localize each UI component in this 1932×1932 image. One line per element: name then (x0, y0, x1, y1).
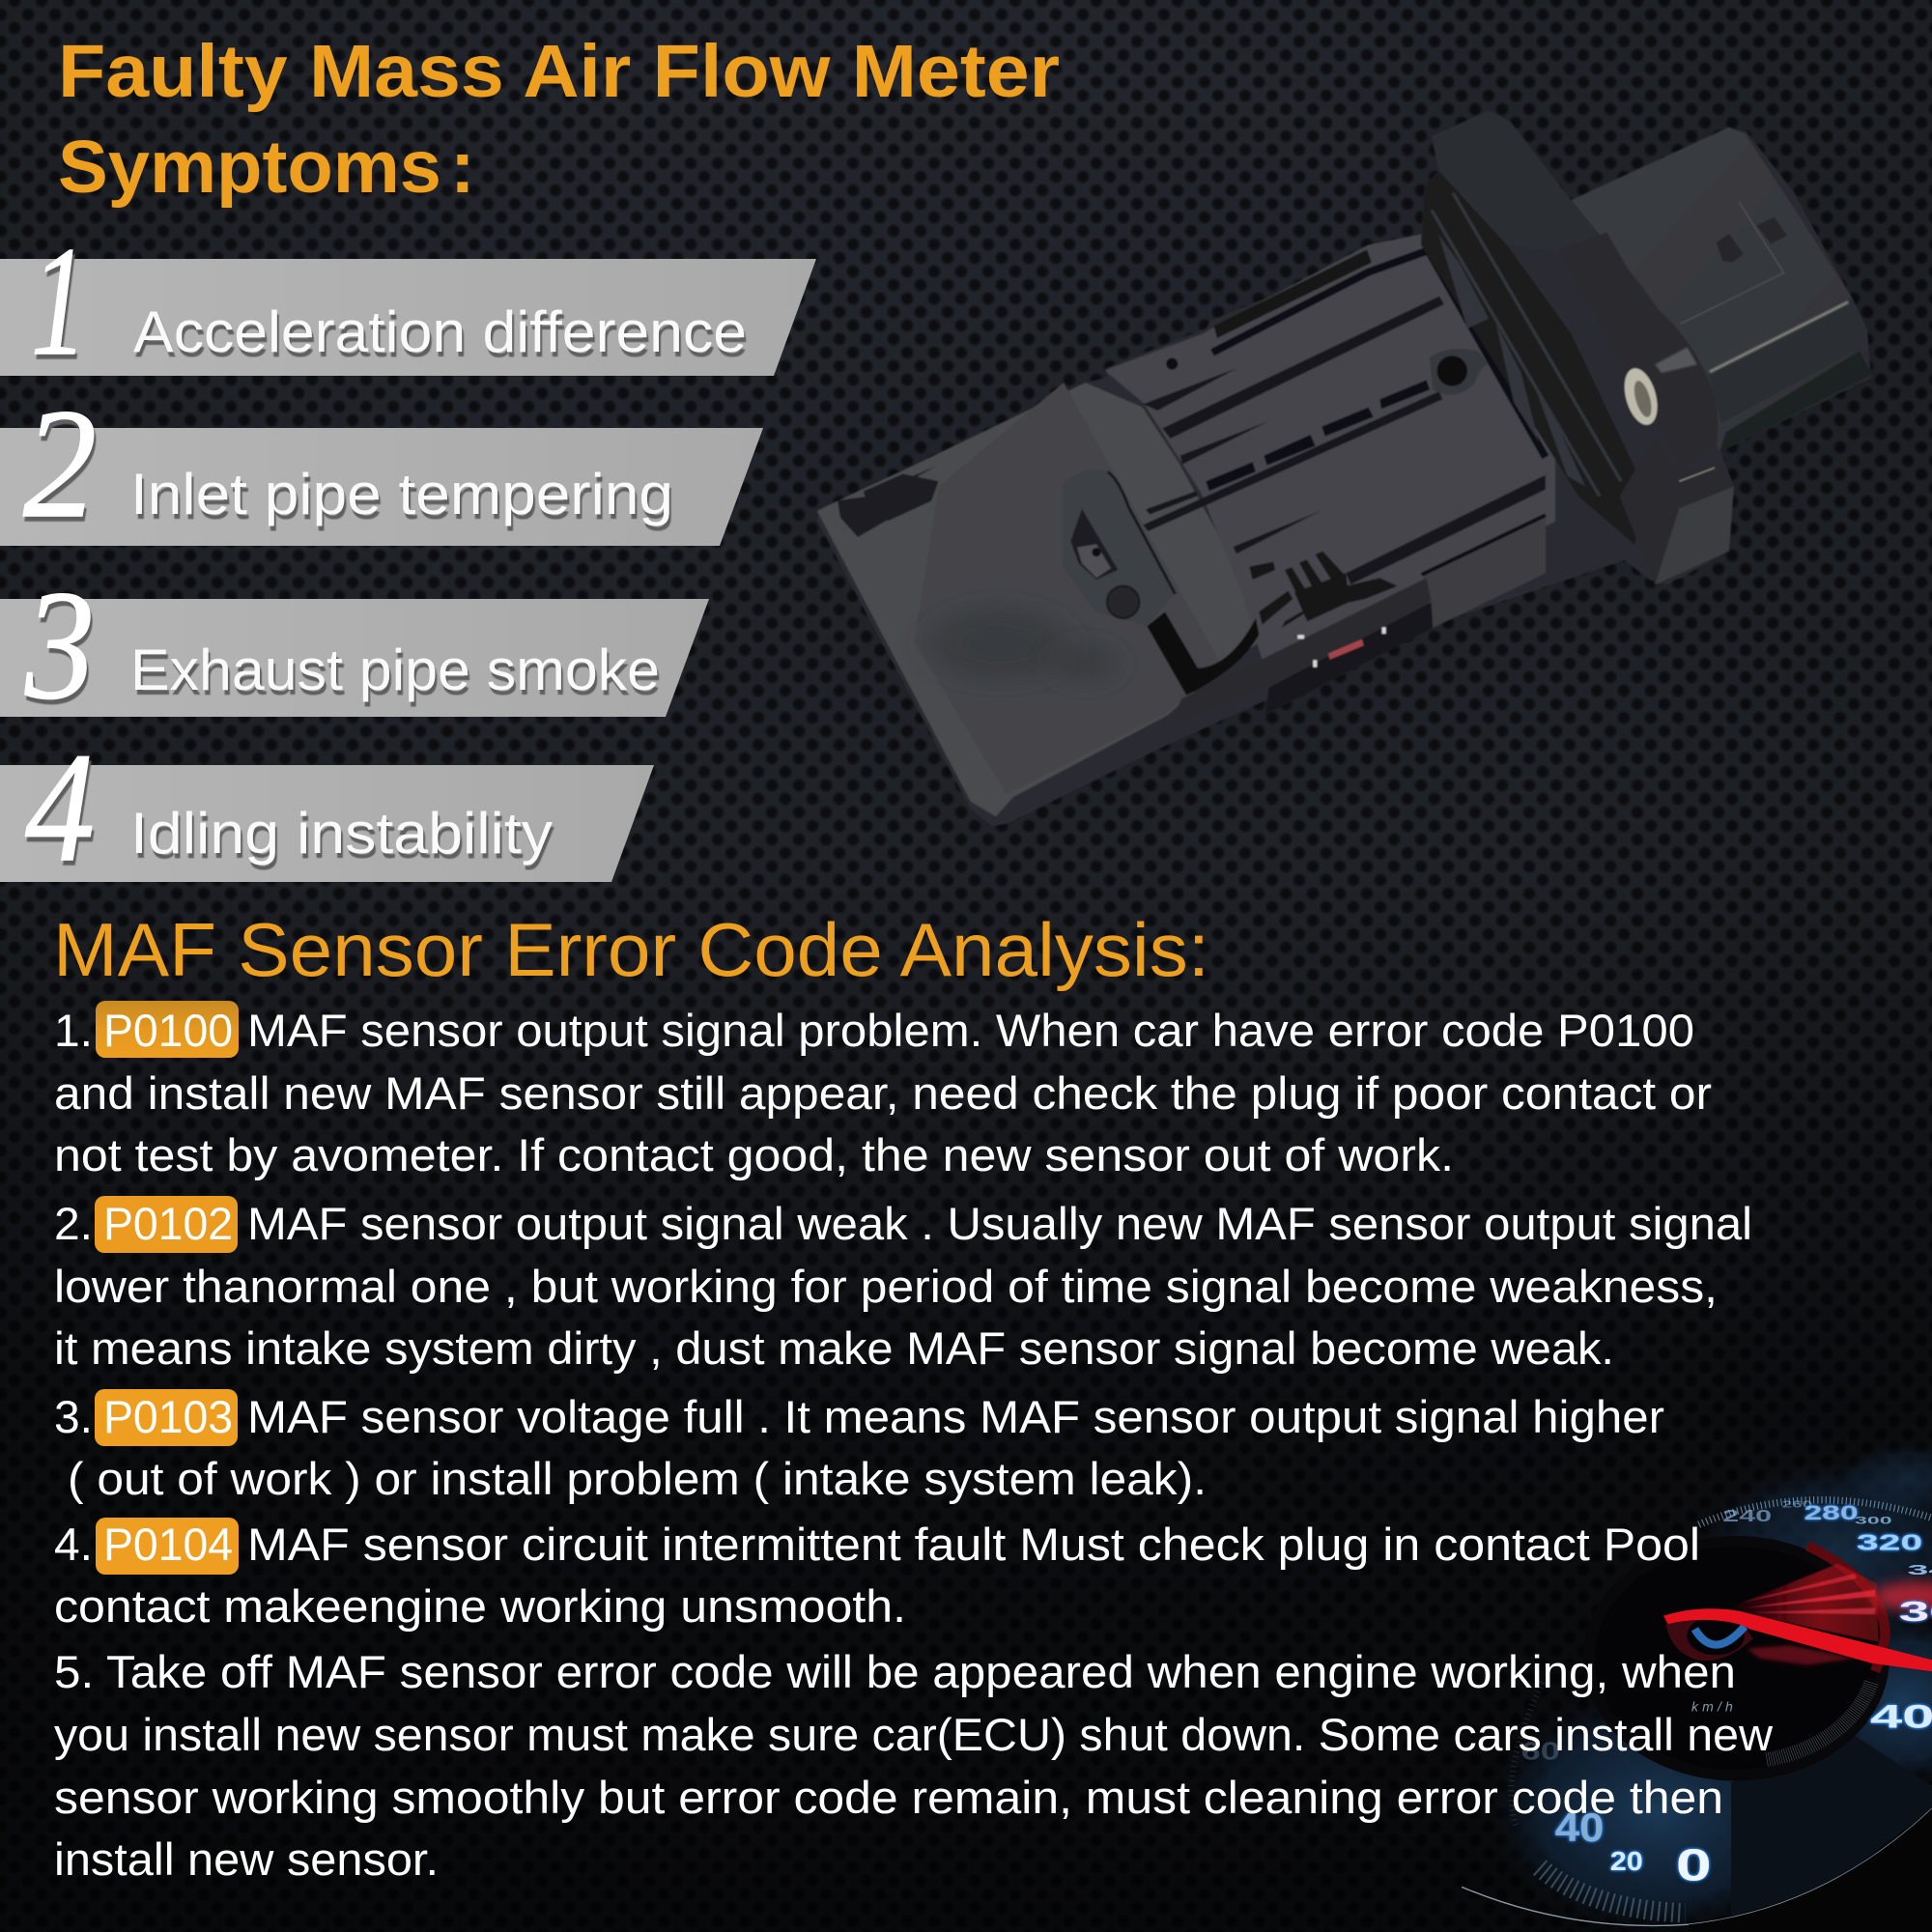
code P0102: MAF sensor output signal weak . Usually new MAF sensor output signal (247, 1198, 1752, 1249)
scale numbers: km/h (1691, 1700, 1733, 1714)
scale numbers: 36 (1899, 1597, 1932, 1628)
ring boss (1430, 349, 1488, 395)
lower groove (1422, 515, 1546, 575)
title: Faulty Mass Air Flow Meter (58, 30, 1060, 113)
code P0102: 2. (54, 1198, 93, 1249)
black corner (1689, 1808, 1932, 1932)
code P0100 (54, 1001, 1712, 1180)
lower barrel (1708, 298, 1867, 424)
boss speckle (1655, 348, 1697, 373)
red beam outside (1872, 1581, 1932, 1611)
latch tab (838, 466, 937, 537)
scale numbers: 300 (1855, 1516, 1892, 1526)
code P0100: and install new MAF sensor still appear, need check the plug if poor contact or (54, 1067, 1712, 1119)
symptom 4 ribbon (0, 722, 654, 895)
vent slots (1206, 380, 1430, 491)
title (58, 30, 1060, 209)
panel: symptoms list (0, 215, 816, 895)
scale numbers: 400 (1870, 1699, 1932, 1735)
bolt hole (1619, 364, 1663, 429)
heading: error code analysis: MAF Sensor Error Code Analysis: (53, 907, 1209, 992)
lower block (1423, 515, 1546, 628)
symptom 3 ribbon (0, 559, 709, 732)
red bezel edge (1807, 1546, 1886, 1671)
symptom 2 ribbon: Inlet pipe tempering (130, 462, 673, 526)
scale numbers: 40 (1555, 1805, 1604, 1850)
title: Symptoms (58, 126, 441, 209)
badge P0103: P0103 (103, 1391, 233, 1442)
connector foot (1719, 351, 1872, 452)
dark lower wedge (1731, 1727, 1932, 1917)
code P0104: contact makeengine working unsmooth. (54, 1580, 906, 1632)
code P0103 (54, 1389, 1664, 1504)
dial glow (1489, 1443, 1932, 1932)
item 5 note: you install new sensor must make sure car(ECU) shut down. Some cars install new (54, 1709, 1774, 1760)
cover edge and recess (1063, 469, 1176, 626)
code P0102 (54, 1196, 1752, 1374)
item 5 note: sensor working smoothly but error code remain, must cleaning error code then (54, 1772, 1723, 1823)
comb connector (1249, 552, 1398, 628)
item 5 note (54, 1646, 1774, 1885)
symptom 1 ribbon: 1 (31, 215, 87, 388)
screw (1107, 586, 1139, 618)
code P0100: 1. (54, 1005, 93, 1056)
scale numbers: 20 (1610, 1845, 1643, 1876)
connector housing (1558, 128, 1872, 584)
cover cutout (1147, 611, 1259, 696)
sensor window (1070, 509, 1118, 580)
badge P0104: P0104 (103, 1519, 233, 1570)
symptom 4 ribbon: Idling instability (130, 801, 553, 866)
code P0104: 4. (54, 1519, 93, 1570)
code P0103: MAF sensor voltage full . It means MAF sensor output signal higher (247, 1391, 1664, 1442)
symptom 3 ribbon: 3 (24, 559, 95, 732)
panel: error code list (54, 1001, 1774, 1885)
badge P0102: P0102 (103, 1198, 233, 1249)
tray frame (1212, 250, 1546, 457)
item 5 note: install new sensor. (54, 1833, 439, 1885)
top slot (1214, 249, 1372, 338)
lower red reflection (1747, 1645, 1855, 1665)
symptom 1 ribbon: Acceleration difference (133, 299, 747, 364)
cover edge line (1108, 471, 1176, 594)
scale numbers (1521, 1500, 1932, 1890)
scale numbers: 320 (1857, 1530, 1922, 1554)
code P0104: MAF sensor circuit intermittent fault Must check plug in contact Pool (247, 1519, 1700, 1570)
tick ring (1511, 1500, 1932, 1913)
item 5 note: 5. Take off MAF sensor error code will be appeared when engine working, when (54, 1646, 1736, 1697)
code P0102: lower thanormal one , but working for period of time signal become weakness, (54, 1261, 1718, 1312)
inner tick ring (1767, 1681, 1872, 1760)
scale numbers: 260 (1782, 1500, 1813, 1511)
sensor outer body (817, 110, 1871, 826)
code P0104 (54, 1518, 1700, 1632)
scale numbers: 0 (1676, 1840, 1712, 1890)
symptom 1 ribbon (0, 215, 816, 388)
bezel arc (1462, 1808, 1932, 1925)
scale numbers: 280 (1804, 1501, 1859, 1524)
symptom 4 ribbon: 4 (25, 722, 95, 895)
red glow fan (1733, 1564, 1879, 1642)
connector label outline (1681, 202, 1784, 324)
scale numbers: 60 (1521, 1737, 1560, 1765)
symptom 3 ribbon: Exhaust pipe smoke (130, 638, 660, 702)
circuit underside (1265, 602, 1433, 715)
latch (864, 474, 939, 521)
lower band (1169, 578, 1432, 724)
inner dial (1589, 1542, 1884, 1776)
scale numbers: 240 (1722, 1506, 1772, 1525)
symptom 2 ribbon (0, 378, 763, 551)
tray detail (1063, 232, 1555, 724)
code P0103: ( out of work ) or install problem ( intake system leak). (68, 1453, 1207, 1504)
title: : (450, 126, 475, 209)
flange ribs zone (1421, 110, 1639, 545)
hub (1665, 1616, 1753, 1661)
ribs (1143, 297, 1546, 584)
red strip and pins (1297, 627, 1386, 668)
code P0102: it means intake system dirty , dust make MAF sensor signal become weak. (54, 1322, 1614, 1374)
red needle (1663, 1608, 1932, 1671)
code P0103: 3. (54, 1391, 93, 1442)
speedometer graphic (1462, 1443, 1932, 1932)
code P0100: not test by avometer. If contact good, the new sensor out of work. (54, 1129, 1454, 1180)
mounting hole (1166, 358, 1178, 370)
barrel highlight (1710, 302, 1848, 372)
badge P0100: P0100 (103, 1005, 233, 1056)
foot block (1620, 436, 1734, 584)
flange boss (1558, 232, 1719, 469)
latch bumps (1717, 217, 1787, 263)
symptom 2 ribbon: 2 (23, 378, 97, 551)
scale numbers: 34 (1907, 1562, 1932, 1578)
code P0100: MAF sensor output signal problem. When car have error code P0100 (247, 1005, 1694, 1056)
icon: mass air flow sensor (817, 110, 1872, 826)
